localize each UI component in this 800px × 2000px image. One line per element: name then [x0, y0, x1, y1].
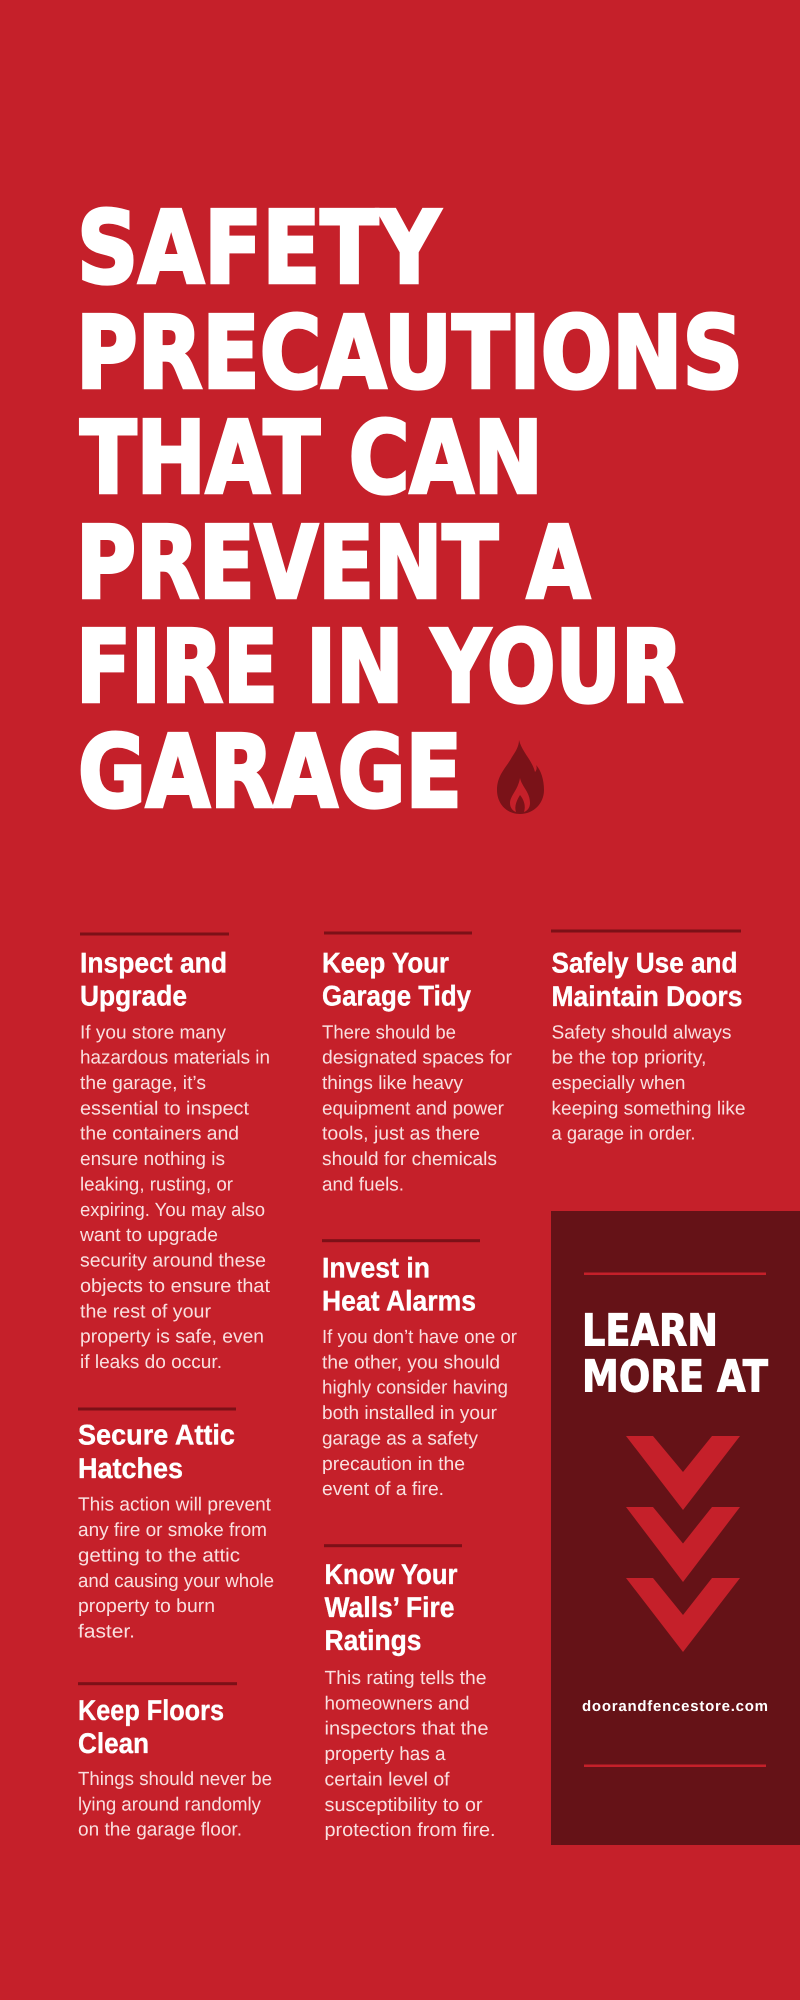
text: secure attic hatches body: This action will prevent [78, 1495, 272, 1516]
heading: learn more at: LEARN [582, 1306, 718, 1356]
text: keep floors clean body: Things should never be [78, 1769, 272, 1790]
text: inspect and upgrade body: property is safe, even [80, 1327, 264, 1348]
text: know your walls fire ratings body [324, 1668, 496, 1841]
text: invest in heat alarms body: event of a fire. [322, 1479, 444, 1500]
title: SAFETY [77, 190, 441, 306]
heading: keep your garage tidy: Keep Your [322, 948, 449, 980]
text: secure attic hatches body: getting to the attic [78, 1545, 240, 1566]
text: safely use and maintain doors body [552, 1022, 746, 1145]
heading: invest in heat alarms [322, 1253, 476, 1318]
text: website url: doorandfencestore.com [582, 1698, 768, 1715]
panel: keep floors clean [78, 1682, 272, 1841]
heading: keep your garage tidy [322, 948, 471, 1013]
panel: keep your garage tidy [322, 932, 513, 1196]
heading: secure attic hatches: Secure Attic [78, 1420, 235, 1452]
text: secure attic hatches body: and causing your whole [78, 1571, 274, 1592]
text: inspect and upgrade body: ensure nothing is [80, 1149, 225, 1170]
text: secure attic hatches body: property to burn [78, 1596, 215, 1617]
text: inspect and upgrade body: leaking, rusting, or [80, 1174, 234, 1196]
title: THAT CAN [80, 400, 543, 516]
text: invest in heat alarms body [322, 1327, 518, 1500]
text: inspect and upgrade body: hazardous materials in [80, 1048, 270, 1069]
text: invest in heat alarms body: garage as a safety [322, 1428, 478, 1449]
text: keep your garage tidy body: designated spaces for [322, 1048, 513, 1069]
heading: keep floors clean: Keep Floors [78, 1695, 224, 1727]
text: know your walls fire ratings body: inspectors that the [324, 1719, 488, 1740]
heading: know your walls fire ratings: Know Your [324, 1559, 458, 1591]
text: inspect and upgrade body: want to upgrade [79, 1225, 218, 1246]
text: keep floors clean body: on the garage floor. [78, 1820, 242, 1841]
heading: inspect and upgrade: Inspect and [80, 948, 227, 980]
heading: inspect and upgrade: Upgrade [80, 981, 187, 1013]
heading: keep your garage tidy: Garage Tidy [322, 981, 471, 1013]
heading: learn more at: MORE AT [582, 1352, 768, 1402]
text: invest in heat alarms body: highly consider having [322, 1378, 508, 1399]
heading: secure attic hatches [78, 1420, 235, 1485]
text: inspect and upgrade body: the containers and [80, 1124, 239, 1145]
text: know your walls fire ratings body: protection from fire. [324, 1820, 496, 1841]
heading: invest in heat alarms: Heat Alarms [322, 1286, 476, 1318]
text: inspect and upgrade body: objects to ensure that [80, 1276, 271, 1297]
text: keep floors clean body: lying around randomly [78, 1794, 261, 1815]
text: safely use and maintain doors body: a garage in order. [552, 1124, 696, 1145]
text: secure attic hatches body: faster. [78, 1622, 135, 1642]
text: keep floors clean body [78, 1769, 272, 1841]
text: keep your garage tidy body: things like heavy [322, 1073, 464, 1094]
text: inspect and upgrade body: expiring. You may also [80, 1200, 265, 1221]
panel: know your walls fire ratings [324, 1544, 496, 1841]
text: keep your garage tidy body: equipment and power [322, 1098, 505, 1119]
text: keep your garage tidy body: and fuels. [322, 1174, 404, 1196]
text: secure attic hatches body: any fire or smoke from [78, 1520, 267, 1541]
text: inspect and upgrade body: essential to inspect [80, 1098, 250, 1119]
text: know your walls fire ratings body: property has a [324, 1744, 446, 1765]
title [76, 190, 743, 830]
heading: know your walls fire ratings: Walls’ Fire [324, 1592, 454, 1624]
title: PREVENT A [76, 504, 590, 622]
text: invest in heat alarms body: the other, you should [322, 1352, 500, 1373]
heading: keep floors clean [78, 1695, 224, 1760]
text: keep your garage tidy body: tools, just as there [322, 1124, 480, 1145]
text: safely use and maintain doors body: Safety should always [552, 1022, 732, 1043]
panel: learn more call to action [551, 1211, 800, 1845]
panel: secure attic hatches [78, 1408, 274, 1642]
text: know your walls fire ratings body: certain level of [324, 1769, 450, 1790]
heading: safely use and maintain doors [552, 948, 742, 1013]
text: safely use and maintain doors body: especially when [552, 1073, 686, 1094]
heading: know your walls fire ratings [324, 1559, 458, 1657]
heading: invest in heat alarms: Invest in [322, 1253, 430, 1285]
text: safely use and maintain doors body: be the top priority, [552, 1048, 706, 1069]
heading: inspect and upgrade [80, 948, 227, 1013]
icon: three down chevrons [626, 1436, 740, 1652]
title: GARAGE [78, 714, 462, 830]
text: know your walls fire ratings body: homeowners and [324, 1693, 470, 1714]
text: keep your garage tidy body: There should be [322, 1022, 456, 1043]
text: secure attic hatches body [78, 1495, 274, 1642]
text: inspect and upgrade body: the garage, it’s [80, 1073, 206, 1094]
text: inspect and upgrade body: If you store many [80, 1022, 226, 1043]
heading: learn more at [582, 1306, 768, 1402]
text: keep your garage tidy body [322, 1022, 513, 1196]
text: keep your garage tidy body: should for chemicals [322, 1149, 497, 1170]
heading: safely use and maintain doors: Maintain Doors [552, 981, 742, 1013]
heading: know your walls fire ratings: Ratings [324, 1625, 422, 1657]
text: invest in heat alarms body: precaution in the [322, 1454, 465, 1475]
panel: inspect and upgrade [79, 932, 271, 1373]
heading: keep floors clean: Clean [78, 1728, 149, 1760]
text: inspect and upgrade body: the rest of your [80, 1301, 212, 1322]
text: inspect and upgrade body: security around these [80, 1250, 266, 1272]
panel: safely use and maintain doors [551, 930, 746, 1145]
text: safely use and maintain doors body: keeping something like [552, 1098, 746, 1119]
panel: invest in heat alarms [322, 1239, 518, 1500]
text: inspect and upgrade body [79, 1022, 271, 1373]
text: invest in heat alarms body: If you don’t have one or [322, 1327, 518, 1348]
heading: secure attic hatches: Hatches [78, 1453, 183, 1485]
heading: safely use and maintain doors: Safely Use and [552, 948, 738, 980]
text: invest in heat alarms body: both installed in your [322, 1403, 498, 1424]
text: know your walls fire ratings body: This rating tells the [324, 1668, 486, 1689]
text: inspect and upgrade body: if leaks do occur. [80, 1352, 222, 1373]
icon: flame [497, 740, 544, 814]
text: know your walls fire ratings body: susceptibility to or [324, 1795, 483, 1816]
